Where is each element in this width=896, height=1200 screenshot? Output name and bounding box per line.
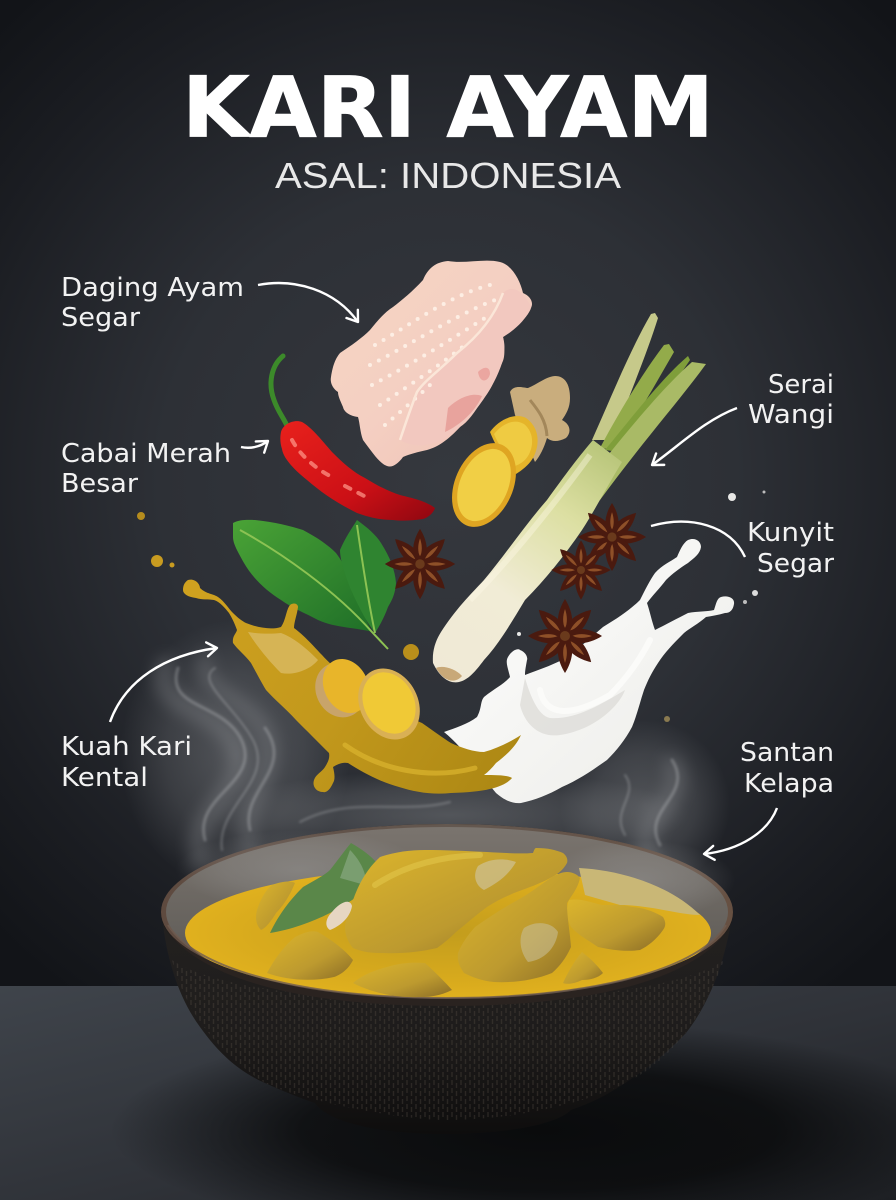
pale cream surface xyxy=(579,868,700,915)
label: Serai Wangi xyxy=(748,370,834,430)
ginger slices on curry xyxy=(306,654,374,726)
chicken skin dimples xyxy=(370,285,495,425)
label: Daging Ayam Segar: Daging Ayam xyxy=(61,273,244,303)
label: Cabai Merah Besar: Besar xyxy=(61,469,138,499)
subtitle: ASAL: INDONESIA xyxy=(275,155,621,196)
label: Kuah Kari Kental xyxy=(61,732,192,793)
coconut milk splash xyxy=(444,490,766,803)
front rim xyxy=(163,925,731,1006)
label: Kunyit Segar xyxy=(747,518,834,579)
label: Santan Kelapa: Kelapa xyxy=(744,769,834,799)
label: Daging Ayam Segar: Segar xyxy=(61,303,140,333)
curry soup xyxy=(185,868,711,998)
bowl texture xyxy=(172,960,724,1120)
label: Cabai Merah Besar xyxy=(61,439,231,499)
lemongrass xyxy=(433,313,706,682)
curry splash xyxy=(137,512,670,794)
label: Kunyit Segar: Kunyit xyxy=(747,518,834,548)
curry leaf xyxy=(270,843,376,933)
arrow: to curry xyxy=(110,648,217,722)
label: Serai Wangi: Wangi xyxy=(748,400,834,430)
leaves xyxy=(233,520,396,649)
ginger xyxy=(440,376,570,537)
label: Santan Kelapa xyxy=(740,738,834,799)
table surface xyxy=(0,986,896,1200)
label: Kunyit Segar: Segar xyxy=(757,549,834,579)
chili xyxy=(271,356,435,521)
connector: Kunyit Segar xyxy=(651,522,745,557)
chicken underside xyxy=(400,289,531,445)
label: Daging Ayam Segar xyxy=(61,273,244,333)
chicken pieces xyxy=(256,848,665,997)
title: KARI AYAM xyxy=(182,58,714,156)
label: Serai Wangi: Serai xyxy=(768,370,834,400)
chicken xyxy=(331,261,532,467)
label: Kuah Kari Kental: Kental xyxy=(61,763,148,793)
steam xyxy=(120,620,730,890)
arrow: to lemongrass xyxy=(652,408,737,465)
arrow: to chicken xyxy=(258,283,358,322)
star anise xyxy=(385,503,646,673)
arrow: to chili xyxy=(241,441,268,448)
label: Kuah Kari Kental: Kuah Kari xyxy=(61,732,192,762)
steam over bowl wall xyxy=(175,830,425,910)
bowl xyxy=(110,824,896,1200)
arrow: to bowl xyxy=(704,808,777,854)
label: Santan Kelapa: Santan xyxy=(740,738,834,768)
label: Cabai Merah Besar: Cabai Merah xyxy=(61,439,231,469)
